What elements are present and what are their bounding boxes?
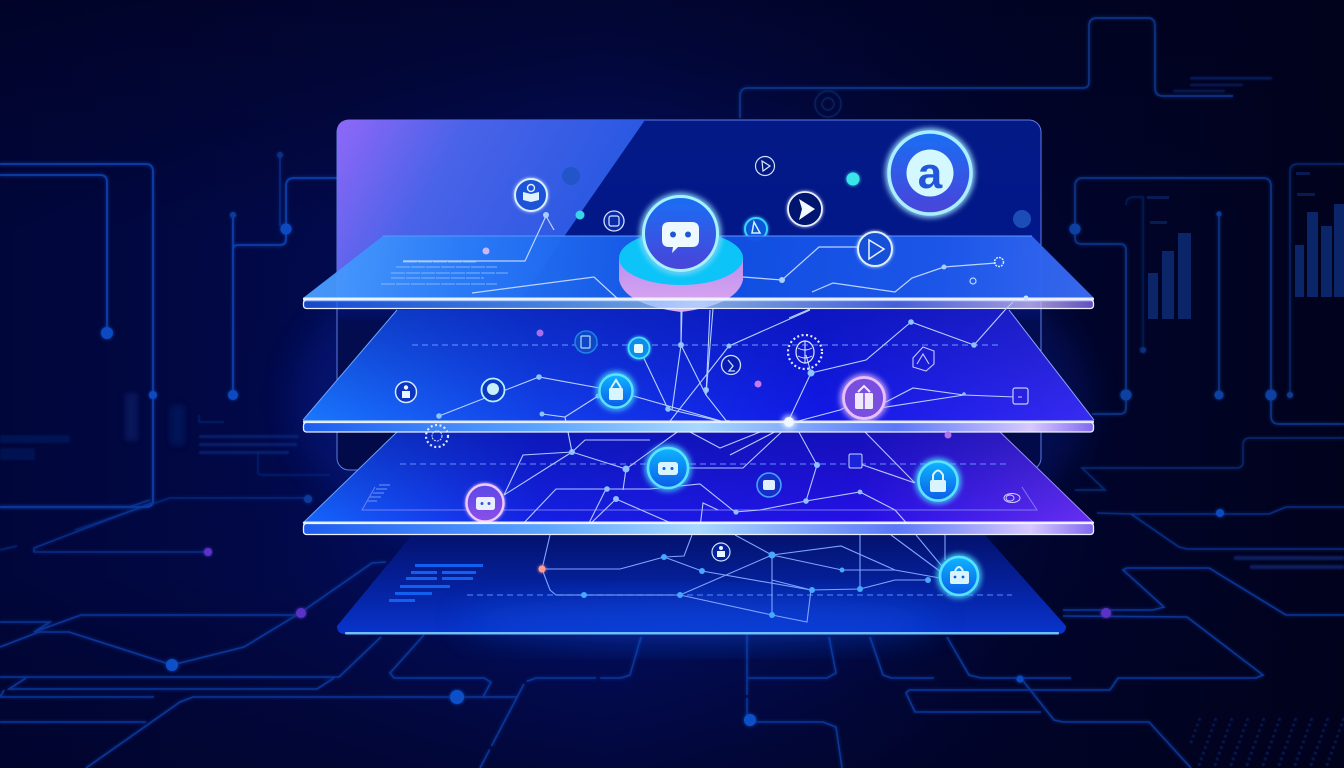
network graph bbox=[436, 310, 1015, 455]
icon: store bbox=[757, 473, 781, 497]
icon: gear small bbox=[994, 258, 1004, 266]
blurred data text: left bbox=[0, 393, 299, 460]
layer 3 bbox=[303, 424, 1094, 534]
letter a: a bbox=[918, 149, 943, 198]
edge of layer 2 bbox=[303, 420, 1094, 432]
dot pattern: lower right bbox=[1190, 718, 1344, 768]
panel: back glass bbox=[337, 120, 1041, 470]
icon: purple bot bbox=[466, 484, 504, 522]
icon: person ring bbox=[396, 382, 416, 402]
icon: swirl bbox=[1004, 494, 1020, 502]
layer 4 bbox=[337, 535, 1066, 644]
node: bright junction bbox=[784, 417, 794, 427]
icon: gift cyan bbox=[600, 374, 632, 408]
dots on back glass bbox=[562, 167, 1031, 228]
inner frame bbox=[362, 487, 1037, 510]
glow behind layer stack bbox=[290, 210, 1090, 590]
dot bbox=[482, 248, 490, 254]
node: corner dot bbox=[1024, 296, 1028, 300]
icon: speech bbox=[482, 378, 504, 402]
icon: tablet bbox=[849, 454, 862, 468]
icon: book bbox=[515, 179, 547, 211]
icon: ring small bbox=[970, 278, 976, 284]
network graph bbox=[542, 535, 945, 622]
blurred data text: lower right bbox=[1234, 556, 1344, 569]
edge of layer 3 bbox=[303, 522, 1094, 534]
network graph bbox=[403, 212, 996, 300]
cylinder pedestal bbox=[619, 196, 743, 312]
dashed line bbox=[400, 463, 1008, 465]
layer 1 bbox=[303, 196, 1094, 312]
blurred data text: top right bbox=[1173, 77, 1272, 92]
icon: lock bbox=[918, 462, 958, 500]
icon: play dark bbox=[788, 192, 822, 226]
dot: pink right bbox=[944, 432, 952, 438]
icon: brain gear bbox=[788, 335, 822, 369]
icon: person bbox=[712, 543, 730, 561]
icon: cyan small bbox=[745, 218, 767, 240]
icon: document bbox=[575, 331, 597, 353]
panel: diagonal reflection bbox=[337, 120, 645, 300]
panel top items: icons on back glass bbox=[515, 132, 1031, 240]
icon: bag bbox=[940, 557, 978, 595]
cylinder top bbox=[619, 231, 743, 285]
icon: ring left bbox=[604, 211, 624, 231]
dashed line bbox=[467, 594, 1012, 596]
edge of layer 1 bbox=[303, 298, 1094, 308]
icon: small play bbox=[756, 156, 774, 176]
gear: below layer 2 bbox=[426, 425, 448, 447]
circuit lines: left bbox=[0, 152, 337, 530]
network graph bbox=[504, 424, 915, 527]
circuit lines: right and top bbox=[740, 18, 1344, 490]
bar chart: right background bbox=[1147, 196, 1191, 319]
circuit lines: bottom bbox=[0, 500, 1344, 768]
icon: chat badge bbox=[644, 196, 718, 270]
icon: gift purple bbox=[844, 378, 884, 418]
node: pink bbox=[538, 566, 546, 572]
text bars bbox=[389, 564, 483, 602]
layer 2 bbox=[303, 310, 1094, 455]
icon: letter a badge bbox=[889, 132, 971, 214]
icon: play blue bbox=[858, 232, 892, 266]
dashed line bbox=[412, 344, 1000, 346]
bar chart: far right background bbox=[1295, 172, 1344, 297]
icon: cyan chip bbox=[628, 338, 650, 358]
icon: cyan bot bbox=[648, 448, 688, 488]
icon: triangle outline bbox=[913, 347, 934, 371]
text lines bbox=[381, 262, 508, 284]
dots bbox=[536, 330, 762, 388]
connector lines below layer 1 bbox=[681, 302, 1013, 395]
stripes bbox=[367, 485, 390, 501]
icon: small square bbox=[1013, 388, 1028, 404]
icon: dark ring bbox=[722, 356, 740, 374]
